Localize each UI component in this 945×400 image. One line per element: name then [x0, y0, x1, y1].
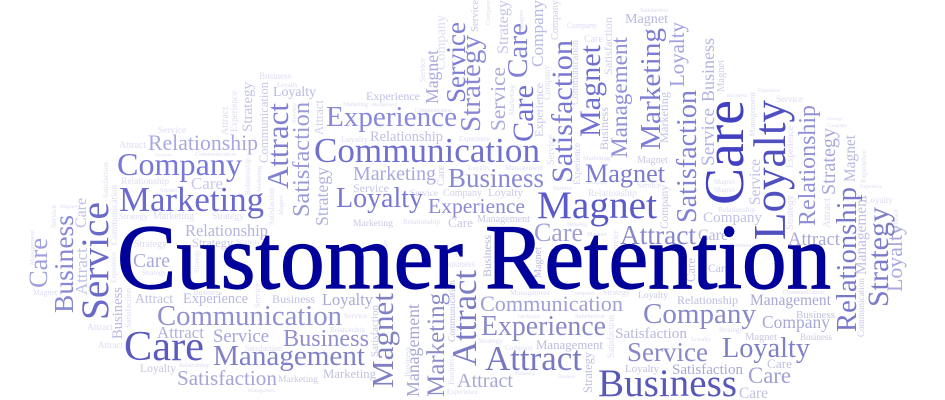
- mid-tone horizontal words: Marketing: [278, 375, 318, 385]
- mid-tone horizontal words: Experience: [183, 291, 248, 307]
- prominent vertical words: Business: [48, 215, 79, 313]
- prominent vertical words: Attract: [260, 103, 295, 189]
- prominent horizontal words: Service: [627, 337, 708, 367]
- prominent vertical words: Loyalty: [745, 100, 795, 240]
- mid-tone horizontal words: Magnet: [745, 332, 777, 343]
- mid-tone horizontal words: Service: [213, 327, 269, 347]
- faint background words: Company: [434, 15, 449, 70]
- mid-tone vertical words: Strategy: [581, 351, 595, 393]
- prominent horizontal words: Loyalty: [336, 183, 423, 214]
- faint background words: Magnet: [60, 204, 77, 210]
- faint background words: Service: [611, 230, 620, 255]
- mid-tone horizontal words: Company: [703, 210, 762, 226]
- faint background words: Satisfaction: [123, 287, 133, 328]
- faint background words: Loyalty: [341, 134, 369, 144]
- mid-tone vertical words: Business: [597, 107, 611, 150]
- mid-tone vertical words: Service: [747, 159, 764, 205]
- faint background words: Company: [567, 21, 597, 30]
- mid-tone horizontal words: Attract: [457, 370, 513, 392]
- faint background words: Business: [727, 93, 747, 99]
- faint background words: Relationship: [330, 326, 365, 334]
- faint background words: Business: [443, 259, 475, 269]
- faint background words: Company: [827, 124, 848, 129]
- mid-tone vertical words: Care: [435, 165, 447, 186]
- mid-tone horizontal words: Relationship: [148, 130, 258, 155]
- mid-tone horizontal words: [133, 12, 841, 400]
- mid-tone horizontal words: Care: [748, 363, 791, 388]
- faint background words: Relationship: [588, 189, 637, 199]
- faint background words: Magnet: [518, 10, 525, 30]
- mid-tone vertical words: Magnet: [842, 134, 859, 182]
- mid-tone vertical words: Business: [110, 287, 126, 339]
- faint background words: Experience: [459, 135, 490, 143]
- mid-tone vertical words: Service: [470, 0, 481, 32]
- mid-tone vertical words: Care: [73, 198, 90, 228]
- mid-tone vertical words: Business: [698, 38, 718, 102]
- faint background words: Relationship: [244, 157, 252, 195]
- faint background words: Strategy: [193, 250, 201, 273]
- prominent horizontal words: Company: [117, 146, 242, 182]
- faint background words: Strategy: [383, 240, 389, 260]
- prominent horizontal words: Magnet: [585, 159, 666, 188]
- prominent vertical words: Marketing: [423, 293, 450, 397]
- faint background words: Relationship: [403, 218, 441, 226]
- mid-tone vertical words: Care: [683, 258, 698, 282]
- prominent horizontal words: Communication: [314, 131, 540, 170]
- prominent horizontal words: Experience: [481, 311, 606, 342]
- mid-tone vertical words: Service: [486, 67, 510, 131]
- faint background words: Business: [558, 375, 575, 380]
- prominent vertical words: Satisfaction: [289, 102, 315, 217]
- faint background words: Relationship: [179, 363, 210, 369]
- mid-tone horizontal words: Company: [762, 312, 830, 332]
- prominent vertical words: Satisfaction: [672, 90, 703, 223]
- mid-tone horizontal words: Attract: [788, 229, 841, 250]
- mid-tone horizontal words: Service: [353, 181, 389, 195]
- mid-tone horizontal words: Management: [536, 337, 603, 352]
- faint background words: Satisfaction: [101, 162, 110, 198]
- prominent horizontal words: Business: [448, 163, 544, 193]
- faint background words: Strategy: [603, 288, 630, 297]
- faint background words: Satisfaction: [517, 315, 540, 320]
- faint background words: Strategy: [827, 116, 843, 121]
- mid-tone vertical words: Communication: [448, 280, 458, 342]
- prominent horizontal words: Loyalty: [722, 333, 810, 364]
- mid-tone vertical words: Management: [853, 194, 870, 275]
- prominent vertical words: Service: [74, 202, 117, 320]
- faint background words: Strategy: [236, 238, 261, 246]
- mid-tone vertical words: Business: [480, 235, 494, 277]
- mid-tone horizontal words: Service: [410, 189, 438, 199]
- faint background words: Experience: [786, 126, 796, 168]
- mid-tone vertical words: Experience: [532, 83, 546, 137]
- prominent horizontal words: Communication: [157, 300, 342, 332]
- mid-tone horizontal words: Loyalty: [625, 363, 659, 375]
- mid-tone vertical words: Communication: [257, 81, 271, 163]
- faint background words: Magnet: [278, 195, 285, 215]
- faint background words: Strategy: [785, 194, 796, 230]
- prominent vertical words: Management: [607, 36, 632, 158]
- faint background words: Attract: [220, 107, 231, 135]
- faint background words: Service: [291, 103, 298, 123]
- prominent horizontal words: [117, 101, 810, 400]
- faint background words: Satisfaction: [267, 188, 276, 225]
- mid-tone horizontal words: Attract: [135, 291, 173, 306]
- faint background words: Experience: [859, 149, 868, 183]
- faint background words: Experience: [110, 252, 118, 283]
- faint background words: Business: [402, 347, 412, 377]
- faint background words: Company: [505, 344, 534, 352]
- mid-tone vertical words: Service: [698, 108, 719, 166]
- faint background words: Management: [248, 389, 276, 394]
- faint background words: Marketing: [567, 223, 587, 228]
- mid-tone horizontal words: Experience: [366, 89, 420, 103]
- prominent vertical words: Marketing: [635, 28, 667, 150]
- faint background words: Business: [193, 288, 222, 297]
- mid-tone horizontal words: Marketing: [353, 219, 393, 229]
- mid-tone vertical words: Magnet: [422, 50, 442, 104]
- faint background words: Company: [485, 0, 492, 25]
- mid-tone vertical words: Strategy: [240, 82, 256, 132]
- faint background words: Business: [259, 71, 291, 81]
- faint background words: Satisfaction: [245, 344, 282, 353]
- mid-tone horizontal words: Loyalty: [140, 363, 176, 375]
- faint background words: Communication: [195, 151, 237, 158]
- prominent vertical words: Strategy: [862, 207, 895, 307]
- prominent horizontal words: Management: [213, 340, 365, 372]
- faint background words: Attract: [891, 208, 900, 230]
- faint background words: Marketing: [153, 211, 194, 222]
- mid-tone horizontal words: Satisfaction: [177, 366, 277, 390]
- faint background words: Company: [542, 65, 552, 100]
- faint background words: Experience: [758, 89, 781, 94]
- prominent vertical words: Relationship: [795, 105, 821, 226]
- mid-tone vertical words: Loyalty: [665, 22, 689, 87]
- faint background words: Experience: [860, 185, 883, 190]
- faint background words: Strategy: [119, 211, 149, 221]
- faint background words: Strategy: [134, 239, 167, 250]
- faint background words: Magnet: [714, 186, 735, 194]
- prominent horizontal words: Magnet: [537, 184, 657, 227]
- mid-tone vertical words: Magnet: [716, 60, 727, 92]
- mid-tone horizontal words: Care: [534, 218, 583, 247]
- faint background words: Magnet: [587, 231, 607, 238]
- faint background words: Strategy: [478, 336, 503, 345]
- faint background words: Attract: [119, 140, 146, 151]
- mid-tone horizontal words: Loyalty: [322, 290, 374, 309]
- faint background words: Magnet: [33, 288, 58, 297]
- prominent horizontal words: Experience: [428, 194, 525, 218]
- mid-tone vertical words: Strategy: [312, 167, 332, 226]
- prominent vertical words: Care: [502, 23, 534, 78]
- faint background words: Service: [49, 204, 58, 228]
- prominent vertical words: Care: [694, 100, 756, 205]
- mid-tone vertical words: Strategy: [818, 128, 840, 195]
- prominent horizontal words: Business: [283, 326, 369, 352]
- faint background words: Communication: [783, 289, 825, 296]
- title: Customer Retention: Customer Retention: [117, 206, 831, 308]
- faint background words: Loyalty: [277, 81, 298, 89]
- faint background words: Loyalty: [691, 336, 712, 343]
- mid-tone horizontal words: Care: [698, 227, 728, 244]
- prominent vertical words: Service: [441, 22, 471, 103]
- faint background words: Management: [510, 288, 551, 297]
- mid-tone horizontal words: Relationship: [677, 293, 738, 307]
- faint background words: Marketing: [508, 84, 516, 115]
- prominent horizontal words: Marketing: [119, 180, 264, 219]
- prominent vertical words: Relationship: [832, 187, 863, 332]
- faint background words: Service: [253, 283, 262, 308]
- prominent horizontal words: Attract: [485, 339, 582, 378]
- mid-tone vertical words: Company: [528, 0, 547, 67]
- faint background words: Attract: [87, 323, 113, 333]
- mid-tone horizontal words: Relationship: [370, 129, 443, 145]
- mid-tone vertical words: Satisfaction: [369, 305, 381, 357]
- faint background words: Satisfaction: [575, 313, 606, 320]
- prominent vertical words: Magnet: [574, 44, 607, 137]
- faint background words: Care: [584, 34, 604, 45]
- faint background words: Service: [637, 181, 661, 190]
- mid-tone horizontal words: Satisfaction: [615, 326, 687, 342]
- faint background words: Marketing: [257, 166, 263, 192]
- faint background words: Communication: [110, 185, 120, 245]
- mid-tone horizontal words: Care: [767, 356, 792, 371]
- mid-tone horizontal words: Loyalty: [638, 291, 668, 301]
- mid-tone horizontal words: Marketing: [353, 163, 436, 185]
- faint background words: Management: [505, 164, 543, 172]
- mid-tone horizontal words: Attract: [157, 323, 204, 342]
- faint background words: Management: [372, 103, 398, 108]
- mid-tone horizontal words: Marketing: [323, 367, 377, 381]
- faint background words: Service: [553, 185, 572, 192]
- faint background words: Management: [29, 230, 36, 265]
- prominent horizontal words: Care: [124, 323, 204, 370]
- mid-tone vertical words: Company: [659, 185, 671, 229]
- mid-tone vertical words: Communication: [570, 40, 581, 105]
- faint background words: Management: [588, 180, 608, 185]
- faint background words: Attract: [98, 340, 123, 350]
- mid-tone horizontal words: Communication: [480, 291, 623, 316]
- faint background words: Attract: [821, 198, 833, 228]
- mid-tone horizontal words: Loyalty: [488, 187, 524, 199]
- mid-tone horizontal words: Business: [796, 309, 835, 321]
- faint background words: Relationship: [718, 206, 756, 214]
- faint background words: Management: [747, 91, 757, 137]
- faint background words: Company: [571, 291, 595, 297]
- mid-tone vertical words: Marketing: [657, 92, 671, 143]
- mid-tone vertical words: Strategy: [495, 0, 512, 54]
- faint background words: Marketing: [583, 155, 611, 162]
- mid-tone horizontal words: Care: [448, 215, 473, 230]
- mid-tone horizontal words: Loyalty: [273, 85, 316, 100]
- faint background words: Experience: [447, 388, 478, 396]
- mid-tone horizontal words: Magnet: [637, 155, 668, 166]
- faint background words: Service: [546, 134, 557, 165]
- faint background words: Relationship: [121, 177, 169, 187]
- mid-tone vertical words: Loyalty: [882, 224, 907, 292]
- faint background words: Loyalty: [468, 164, 490, 172]
- faint background words: Business: [446, 355, 456, 385]
- faint background words: Satisfaction: [640, 7, 668, 14]
- mid-tone horizontal words: Business: [272, 292, 315, 306]
- prominent vertical words: Magnet: [365, 293, 400, 388]
- mid-tone horizontal words: Strategy: [192, 236, 234, 250]
- faint background words: Service: [344, 311, 368, 320]
- mid-tone vertical words: Care: [23, 238, 53, 288]
- mid-tone horizontal words: Satisfaction: [672, 362, 743, 378]
- faint background words: Attract: [159, 187, 177, 194]
- faint background words: Service: [418, 58, 427, 82]
- mid-tone vertical words: Magnet: [533, 247, 544, 278]
- mid-tone horizontal words: Management: [477, 214, 530, 225]
- prominent vertical words: Strategy: [455, 35, 487, 132]
- faint background words: Service: [776, 94, 803, 104]
- mid-tone vertical words: Attract: [312, 99, 326, 135]
- faint background words: Strategy: [212, 212, 244, 222]
- faint background words: Marketing: [343, 102, 368, 108]
- mid-tone horizontal words: Care: [708, 263, 730, 275]
- mid-tone horizontal words: Management: [750, 292, 832, 309]
- prominent vertical words: Care: [507, 85, 540, 142]
- mid-tone vertical words: Attract: [72, 248, 91, 295]
- mid-tone horizontal words: Relationship: [185, 221, 268, 240]
- mid-tone vertical words: Satisfaction: [601, 17, 615, 75]
- mid-tone horizontal words: Business: [800, 332, 832, 342]
- faint background words: Communication: [415, 108, 452, 114]
- faint background words: Management: [155, 152, 173, 157]
- prominent horizontal words: Experience: [326, 101, 457, 133]
- faint background words: Satisfaction: [606, 315, 616, 358]
- prominent horizontal words: Attract: [620, 219, 696, 250]
- faint background words: Strategy: [719, 326, 744, 334]
- mid-tone vertical words: Experience: [573, 143, 583, 185]
- faint background words: Service: [158, 126, 186, 136]
- mid-tone horizontal words: Care: [191, 174, 223, 193]
- faint background words: Loyalty: [865, 195, 893, 205]
- faint background words: Communication: [730, 243, 770, 249]
- faint background words: Magnet: [714, 178, 735, 186]
- faint background words: Experience: [229, 91, 239, 132]
- mid-tone horizontal words: Care: [133, 251, 170, 272]
- mid-tone vertical words: Company: [550, 0, 561, 40]
- mid-tone vertical words: Communication: [856, 277, 866, 337]
- mid-tone horizontal words: Company: [443, 188, 482, 199]
- prominent horizontal words: Company: [643, 298, 756, 330]
- prominent vertical words: Satisfaction: [546, 40, 579, 183]
- mid-tone vertical words: Management: [403, 304, 423, 397]
- faint background words: Marketing: [515, 372, 535, 377]
- prominent vertical words: Attract: [446, 270, 484, 366]
- faint background words: Strategy: [142, 269, 167, 277]
- mid-tone horizontal words: Magnet: [625, 12, 668, 27]
